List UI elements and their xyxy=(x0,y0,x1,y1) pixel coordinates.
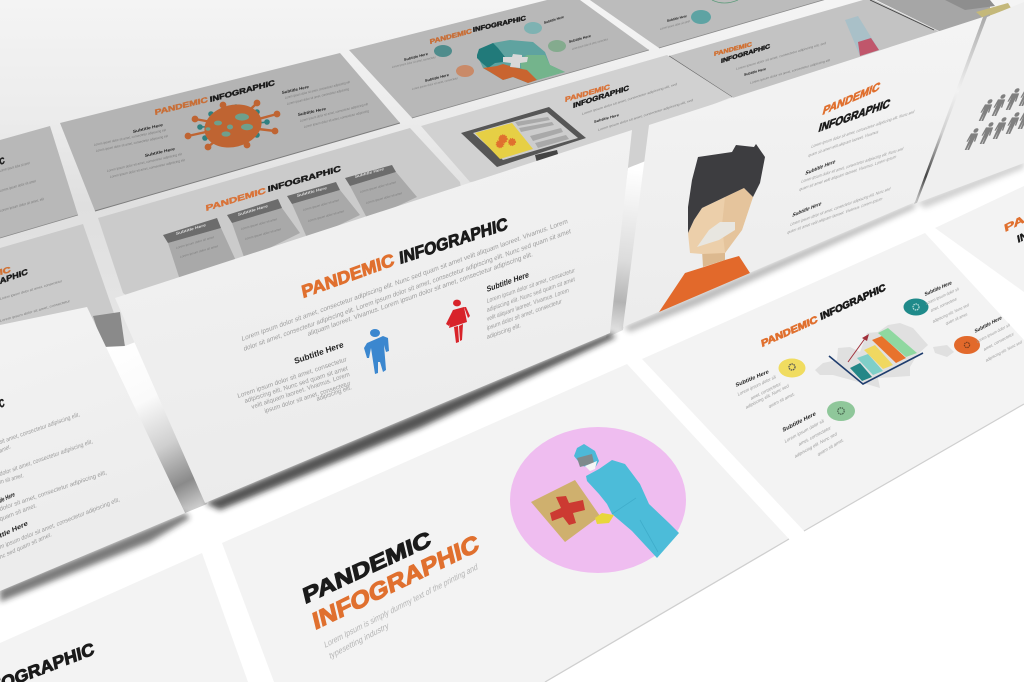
head slide circles xyxy=(434,22,566,77)
chart text left 1: Subtitle Here xyxy=(735,367,770,388)
chart text left 2: quam sit amet. xyxy=(817,437,844,457)
virus slide text left: Lorem ipsum dolor sit amet, consectetur adipiscing elit xyxy=(94,128,166,147)
monitor slide title: PANDEMIC xyxy=(565,84,610,105)
left slide text xyxy=(0,278,70,323)
icon: orange circle xyxy=(954,336,980,354)
table slide title: PANDEMIC xyxy=(205,187,267,213)
head slide text: Lorem ipsum dolor sit amet, consectetur xyxy=(572,37,608,51)
icon: virus xyxy=(186,99,279,153)
icon: teal circle xyxy=(904,298,928,316)
icon: head puzzle xyxy=(477,40,565,83)
portrait slide text: Lorem ipsum dolor sit amet, consectetur adipiscing elit. Nunc sed xyxy=(801,146,904,185)
shadow: people standing slide xyxy=(205,333,616,510)
icon: monitor xyxy=(461,107,586,167)
people subtitle left: Lorem ipsum dolor sit amet, consectetur xyxy=(237,356,348,400)
panel: head slide xyxy=(349,0,649,118)
chart text left 2: Subtitle Here xyxy=(782,409,817,433)
portrait slide text: quam sit amet velit aliquam laoreet. Vivamus. Lorem ipsum xyxy=(787,196,883,235)
hair xyxy=(688,144,765,233)
test tube slide text: Lorem ipsum dolor sit amet, consectetur adipiscing elit, sed xyxy=(736,41,826,71)
portrait slide text: Subtitle Here xyxy=(792,199,823,218)
portrait slide text: quam sit amet velit aliquam laoreet. Vivamus. Lorem ipsum xyxy=(799,154,897,193)
cover title xyxy=(301,527,481,635)
left slide text: Lorem ipsum dolor sit amet, consectetur xyxy=(0,278,62,301)
portrait slide title: INFOGRAPHIC xyxy=(817,97,892,135)
shadow: portrait standing slide xyxy=(623,202,915,332)
chart text left 1: adipiscing elit. Nunc sed xyxy=(745,383,789,410)
monitor slide title: INFOGRAPHIC xyxy=(573,85,629,110)
people subtitle right: Lorem ipsum dolor sit amet, consectetur xyxy=(487,268,575,305)
test tube slide title: INFOGRAPHIC xyxy=(721,43,771,66)
chart text right 1: amet, consectetur xyxy=(930,296,957,313)
chart text left 2 xyxy=(782,409,844,459)
people subtitle left: Subtitle Here xyxy=(293,341,345,366)
gap strip between portrait and right slides xyxy=(914,14,990,204)
head slide title: PANDEMIC xyxy=(429,28,473,47)
cover title: PANDEMIC xyxy=(301,527,433,609)
chart text right 1: adipiscing elit. Nunc sed xyxy=(932,302,969,324)
left slide text: Lorem ipsum dolor sit amet, consectetur xyxy=(0,299,70,323)
standing slide text xyxy=(0,412,120,561)
column 3 xyxy=(287,182,360,240)
column 2 xyxy=(227,199,300,260)
mask xyxy=(697,222,735,247)
people subtitle left xyxy=(237,341,353,415)
face xyxy=(688,188,753,254)
column 1: Subtitle Here xyxy=(176,222,207,236)
panel: people standing slide: aliquam laoreet. Vivamus. Lorem ipsum dolor sit amet, consectetur adipiscing elit. xyxy=(307,250,533,338)
chart text left 2: amet, consectetur xyxy=(798,425,832,447)
portrait slide text: Subtitle Here xyxy=(805,157,837,176)
chart text left 1: Lorem ipsum dolor sit xyxy=(737,374,776,397)
monitor slide text xyxy=(582,82,693,132)
shadow: left standing slide xyxy=(0,513,190,602)
portrait slide text: quam sit amet velit aliquam laoreet. Vivamus xyxy=(808,129,879,158)
icon: blue man xyxy=(364,329,389,374)
illustration: medical worker xyxy=(531,444,679,558)
right flat slide title fragment: PA xyxy=(1003,212,1024,235)
column 2: Lorem ipsum dolor sit amet xyxy=(245,227,282,241)
neck xyxy=(702,240,725,267)
head slide title xyxy=(429,15,526,47)
virus slide text right: Lorem ipsum dolor sit amet, consectetur adipiscing xyxy=(287,86,350,106)
chart text left 1: quam sit amet. xyxy=(768,391,795,409)
column 3: Lorem ipsum dolor sit amet xyxy=(303,198,340,212)
panel: cover slide xyxy=(222,364,789,682)
panel: monitor slide xyxy=(421,55,732,182)
virus slide text right: Lorem ipsum dolor sit amet, consectetur adipiscing elit xyxy=(300,101,368,123)
people subtitle left: adipiscing elit. Nunc sed quam sit amet xyxy=(244,365,349,405)
column 4: Lorem ipsum dolor sit amet xyxy=(360,180,397,194)
panel: right standing slide xyxy=(917,2,1024,203)
panel: right flat slide xyxy=(935,186,1024,292)
bar fragment top right xyxy=(945,0,995,10)
icon: yellow circle xyxy=(778,358,806,378)
head slide text: Subtitle Here xyxy=(404,51,429,62)
icon: ring arcs xyxy=(712,0,738,3)
test tube slide text: Lorem ipsum dolor sit amet, consectetur adipiscing elit xyxy=(750,58,830,85)
standing slide text: nc sed quam sit amet. xyxy=(0,531,52,561)
portrait slide text xyxy=(787,109,915,235)
monitor slide text: Lorem ipsum dolor sit amet, consectetur adipiscing elit, sed xyxy=(598,98,693,132)
icon: red woman xyxy=(446,300,470,343)
head slide text: Subtitle Here xyxy=(425,72,450,83)
icon: green circle xyxy=(827,401,855,421)
panel: table slide xyxy=(98,128,470,305)
column 4: Subtitle Here xyxy=(355,166,385,179)
monitor slide text: Lorem ipsum dolor sit amet, consectetur adipiscing elit, sed xyxy=(582,82,677,116)
panel: chart top slide xyxy=(587,0,830,48)
column 4 xyxy=(345,165,417,220)
people subtitle right: adipiscing elit. Nunc sed quam sit amet xyxy=(487,277,575,314)
chart text right 2 xyxy=(974,315,1022,363)
goggles xyxy=(577,454,594,467)
chart slide title: INFOGRAPHIC xyxy=(819,281,886,322)
table slide title xyxy=(205,164,341,213)
virus slide title: INFOGRAPHIC xyxy=(210,79,276,104)
people slide paragraph xyxy=(241,217,571,353)
column 2: Lorem ipsum dolor sit amet xyxy=(241,217,278,231)
chart text right 1: quam sit amet. xyxy=(945,311,968,326)
column 1: Lorem ipsum dolor sit amet xyxy=(180,244,219,259)
right flat slide title fragment: IN xyxy=(1016,228,1024,246)
monitor slide text: Subtitle Here xyxy=(594,112,620,124)
chart slide title: PANDEMIC xyxy=(760,314,819,349)
portrait slide title: PANDEMIC xyxy=(821,80,882,119)
head slide text: Lorem ipsum dolor sit amet, consectetur xyxy=(392,55,436,69)
chart top slide text xyxy=(660,14,691,31)
chart text right 2: Lorem ipsum dolor sit xyxy=(976,322,1010,344)
head slide title: INFOGRAPHIC xyxy=(473,15,526,34)
panel: test tube slide xyxy=(669,0,940,120)
column 2: Subtitle Here xyxy=(238,203,269,217)
portrait slide text: Lorem ipsum dolor sit amet, consectetur adipiscing elit. Nunc sed xyxy=(811,109,915,150)
standing slide text: m ipsum dolor sit amet, consectetur adipiscing elit, xyxy=(0,497,120,551)
column 1: Lorem ipsum dolor sit amet xyxy=(176,235,215,250)
head slide text: Subtitle Here xyxy=(544,14,565,25)
panel: back left slide xyxy=(0,126,78,238)
chart text left 2: Lorem ipsum dolor sit xyxy=(784,418,824,444)
right flat slide title fragment xyxy=(1003,212,1024,246)
suit folds xyxy=(612,498,658,552)
people subtitle right: Subtitle Here xyxy=(486,270,530,295)
shadow: right standing slide xyxy=(916,160,1024,208)
shirt xyxy=(659,256,750,312)
illustration: pink circle xyxy=(510,427,686,573)
icon: rows of people xyxy=(962,84,1024,150)
virus slide text right: Lorem ipsum dolor sit amet, consectetur adipiscing elit xyxy=(285,79,350,100)
standing slide text: dolor sit amet, consectetur adipiscing elit, xyxy=(0,439,94,478)
people subtitle left: ipsum dolor sit amet, consectetur xyxy=(264,381,352,415)
panel: bottom left flat slide xyxy=(0,553,248,682)
panel: portrait standing slide xyxy=(623,17,983,327)
chart text left 1: amet, consectetur xyxy=(750,381,782,401)
standing slide text: sit amet, consectetur adipiscing elit, xyxy=(0,412,81,446)
head slide text: Subtitle Here xyxy=(569,33,592,44)
people subtitle left: adipiscing elit. xyxy=(316,384,353,404)
head slide text xyxy=(392,14,608,91)
chart text right 2: amet, consectetur xyxy=(983,330,1015,352)
world map xyxy=(815,323,954,388)
monitor slide title xyxy=(565,84,629,110)
icon: teal circle xyxy=(691,10,711,24)
panel: virus slide xyxy=(60,53,400,211)
virus slide title: PANDEMIC xyxy=(155,97,209,117)
chart text right 2: Subtitle Here xyxy=(974,315,1002,334)
panel: left standing slide xyxy=(0,307,185,591)
icon: test tube xyxy=(845,16,879,56)
left slide title fragment xyxy=(0,266,29,287)
column 4: Lorem ipsum dolor sit amet xyxy=(366,191,403,205)
panel: left second-row slide xyxy=(0,224,125,390)
virus slide text left: Subtitle Here xyxy=(145,146,176,158)
chart text left 2: adipiscing elit. Nunc sed xyxy=(794,431,837,459)
people slide title: PANDEMIC xyxy=(300,250,396,302)
panel: chart slide xyxy=(642,233,1024,531)
portrait illustration xyxy=(659,144,765,312)
virus slide text right xyxy=(282,79,369,129)
people subtitle left: velit aliquam laoreet. Vivamus. Lorem xyxy=(251,371,350,411)
portrait slide title xyxy=(817,80,892,135)
chart text left 1 xyxy=(735,367,795,410)
virus slide text left: Lorem ipsum dolor sit amet, consectetur adipiscing elit xyxy=(96,134,168,153)
suit xyxy=(586,460,679,558)
column 1 xyxy=(163,218,237,280)
cover description: Lorem Ipsum is simply dummy text of the printing and xyxy=(323,561,478,650)
bar chart xyxy=(829,328,923,384)
gap strip between left and people slides xyxy=(103,341,207,513)
chart text right 2: adipiscing elit. Nunc sed xyxy=(985,339,1022,363)
panel: people standing slide xyxy=(115,130,632,503)
virus slide text left: Lorem ipsum dolor sit amet, consectetur adipiscing elit xyxy=(107,152,182,173)
column 3: Subtitle Here xyxy=(297,185,328,198)
white table surface xyxy=(0,160,1024,682)
cover title: INFOGRAPHIC xyxy=(310,530,481,635)
panel: far right back slide xyxy=(872,0,1011,32)
gap strip between people and portrait slides xyxy=(606,160,648,338)
cover description xyxy=(323,561,478,661)
test tube slide title: PANDEMIC xyxy=(714,40,753,57)
face shade xyxy=(722,188,753,253)
glove xyxy=(595,513,614,524)
test tube slide text xyxy=(736,41,830,85)
chart text right 1: Subtitle Here xyxy=(924,280,952,297)
people slide title xyxy=(300,214,508,302)
virus slide text right: Lorem ipsum dolor sit amet, consectetur adipiscing xyxy=(304,108,369,129)
portrait slide text: Lorem ipsum dolor sit amet, consectetur adipiscing elit. Nunc sed xyxy=(790,186,891,228)
test tube slide title xyxy=(714,40,771,66)
chart slide title xyxy=(760,281,886,349)
chart text right 1 xyxy=(924,280,969,326)
virus slide text left: Subtitle Here xyxy=(133,122,164,134)
yellow corner xyxy=(976,3,1011,18)
hood xyxy=(574,444,599,468)
test tube slide text: Subtitle Here xyxy=(744,66,767,77)
icon: medical box xyxy=(531,480,600,542)
column 3: Lorem ipsum dolor sit amet xyxy=(308,209,345,223)
people slide title: INFOGRAPHIC xyxy=(399,214,508,268)
cover description: typesetting industry xyxy=(328,620,390,661)
people subtitle right: ipsum dolor sit amet, consectetur xyxy=(487,299,562,332)
chart top slide text: Subtitle Here xyxy=(667,14,688,23)
standing slide text: dolor sit amet, consectetur adipiscing elit, xyxy=(0,469,108,513)
gray block xyxy=(93,312,125,347)
head slide text: Lorem ipsum dolor sit amet, consectetur xyxy=(412,76,458,91)
chart top slide text: Lorem ipsum dolor sit amet xyxy=(660,19,691,31)
virus slide text right: Subtitle Here xyxy=(298,106,327,117)
table slide title: INFOGRAPHIC xyxy=(267,164,341,194)
chart text right 1: Lorem ipsum dolor sit xyxy=(925,286,959,306)
people subtitle right xyxy=(486,268,575,340)
people subtitle right: adipiscing elit. xyxy=(486,322,521,340)
virus slide text right: Subtitle Here xyxy=(282,84,310,95)
face mask xyxy=(585,461,597,471)
virus slide title xyxy=(155,79,276,117)
virus slide text left xyxy=(94,122,185,179)
people subtitle right: velit aliquam laoreet. Vivamus. Lorem xyxy=(487,288,569,323)
virus slide text left: Lorem ipsum dolor sit amet, consectetur adipiscing elit xyxy=(110,158,185,179)
